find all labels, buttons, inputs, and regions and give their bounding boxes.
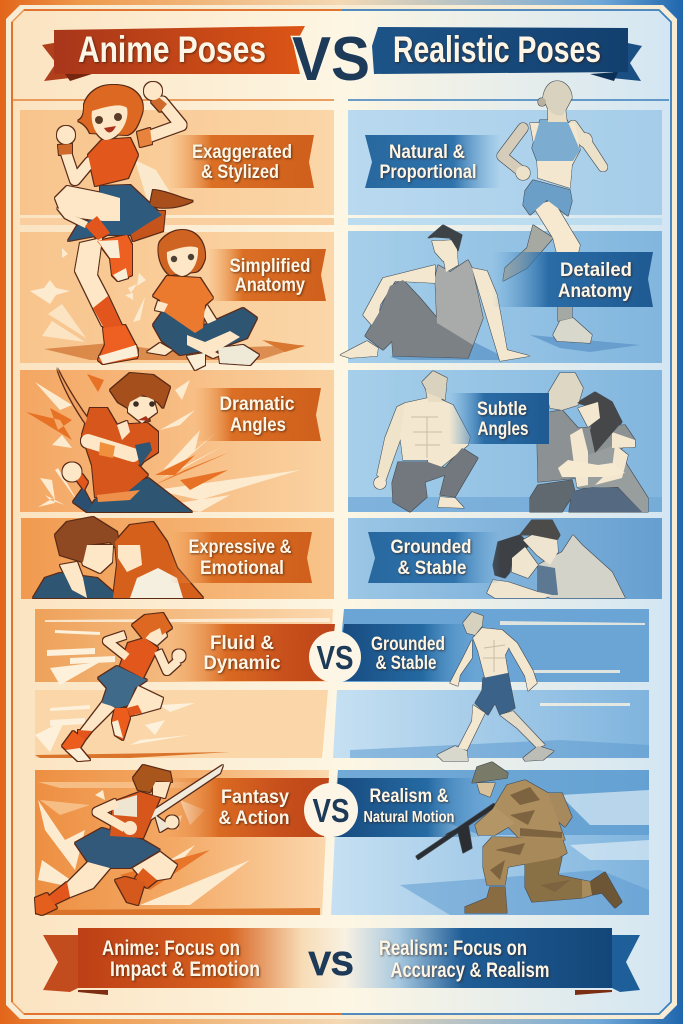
label: Natural & Proportional — [365, 135, 501, 188]
label: Subtle Angles — [449, 393, 549, 444]
panel: right column backgrounds — [348, 110, 662, 599]
figure: realistic couple close — [487, 520, 625, 598]
callout: bottom banner: Impact & Emotion — [110, 958, 260, 981]
label: Natural & Proportional: Proportional — [380, 162, 476, 183]
figure: realistic couple embracing — [530, 373, 648, 512]
label: Dramatic Angles: Angles — [230, 415, 286, 436]
figure: realistic man sitting — [340, 225, 530, 361]
figure: anime girl jumping — [55, 82, 193, 364]
title banner: Anime Poses — [42, 26, 305, 81]
figure: anime girl running — [62, 613, 186, 761]
label: Detailed Anatomy: Anatomy — [558, 281, 632, 302]
flame: row 1 — [135, 160, 178, 210]
label: Detailed Anatomy: Detailed — [560, 260, 632, 281]
label: Exaggerated & Stylized — [168, 135, 314, 188]
callout: bottom banner: Realism: Focus on — [379, 937, 527, 960]
label: Exaggerated & Stylized: & Stylized — [201, 162, 279, 183]
label: Grounded & Stable: & Stable — [398, 558, 466, 579]
figure: anime boy sitting — [147, 230, 259, 370]
callout: bottom banner — [43, 928, 640, 995]
callout: bottom banner: Accuracy & Realism — [390, 959, 550, 982]
band: Fantasy and Action: & Action — [218, 808, 290, 829]
figure: realistic woman running — [502, 81, 603, 343]
title VS: VS — [292, 25, 370, 94]
label: Expressive & Emotional: Emotional — [200, 558, 284, 579]
figure: anime couple — [33, 517, 203, 598]
label: Simplified Anatomy: Simplified — [230, 256, 310, 277]
VS badge: row 5 — [309, 631, 361, 683]
title banner: Realistic Poses — [372, 27, 642, 81]
figure: kneeling soldier with rifle — [417, 762, 622, 913]
label: Dramatic Angles — [194, 388, 321, 441]
VS badge: row 5: VS — [316, 639, 354, 676]
VS badge: row 6 — [304, 783, 358, 837]
burst: row 3 left — [26, 374, 300, 512]
band: Grounded and Stable (lower): Grounded — [371, 634, 445, 655]
label: Grounded & Stable — [368, 532, 501, 583]
effects: speed lines and bursts — [35, 630, 320, 915]
title banner: Anime Poses: Anime Poses — [78, 29, 266, 70]
band: Realism and Natural Motion — [333, 778, 490, 837]
band: Grounded and Stable (lower): & Stable — [376, 653, 436, 674]
header divider lines — [13, 99, 334, 101]
label: Simplified Anatomy: Anatomy — [235, 275, 305, 296]
label: Expressive & Emotional: Expressive & — [188, 537, 292, 558]
figure: anime boy with blade — [57, 368, 192, 512]
callout: bottom banner: Anime: Focus on — [102, 937, 240, 960]
band: Realism and Natural Motion: Realism & — [370, 786, 449, 807]
label: Expressive & Emotional — [170, 532, 312, 583]
strip backgrounds: lower section — [35, 609, 649, 915]
VS badge: row 6: VS — [312, 792, 350, 829]
sparkles and ground: row 2 left — [30, 248, 305, 360]
figure: realistic man walking — [437, 612, 554, 761]
band: Realism and Natural Motion: Natural Motion — [364, 809, 454, 826]
band: Fantasy and Action: Fantasy — [221, 787, 289, 808]
label: Simplified Anatomy — [207, 249, 326, 301]
callout: bottom banner: VS — [308, 945, 354, 982]
panel: left column backgrounds — [20, 110, 334, 599]
title banner: Realistic Poses: Realistic Poses — [393, 29, 601, 70]
label: Dramatic Angles: Dramatic — [220, 394, 295, 415]
figure: bald man crouching — [374, 371, 478, 512]
band: Fluid and Dynamic: Fluid & — [210, 633, 274, 654]
label: Detailed Anatomy — [492, 252, 653, 307]
band: Grounded and Stable (lower) — [337, 624, 480, 681]
label: Subtle Angles: Subtle — [477, 399, 527, 420]
band: Fluid and Dynamic: Dynamic — [204, 653, 281, 674]
label: Exaggerated & Stylized: Exaggerated — [192, 142, 292, 163]
figure: anime girl with sword — [35, 765, 223, 915]
band: Fantasy and Action — [160, 778, 329, 837]
label: Subtle Angles: Angles — [478, 419, 528, 440]
label: Natural & Proportional: Natural & — [389, 142, 465, 163]
label: Grounded & Stable: Grounded — [390, 537, 472, 558]
band: Fluid and Dynamic — [168, 624, 335, 681]
